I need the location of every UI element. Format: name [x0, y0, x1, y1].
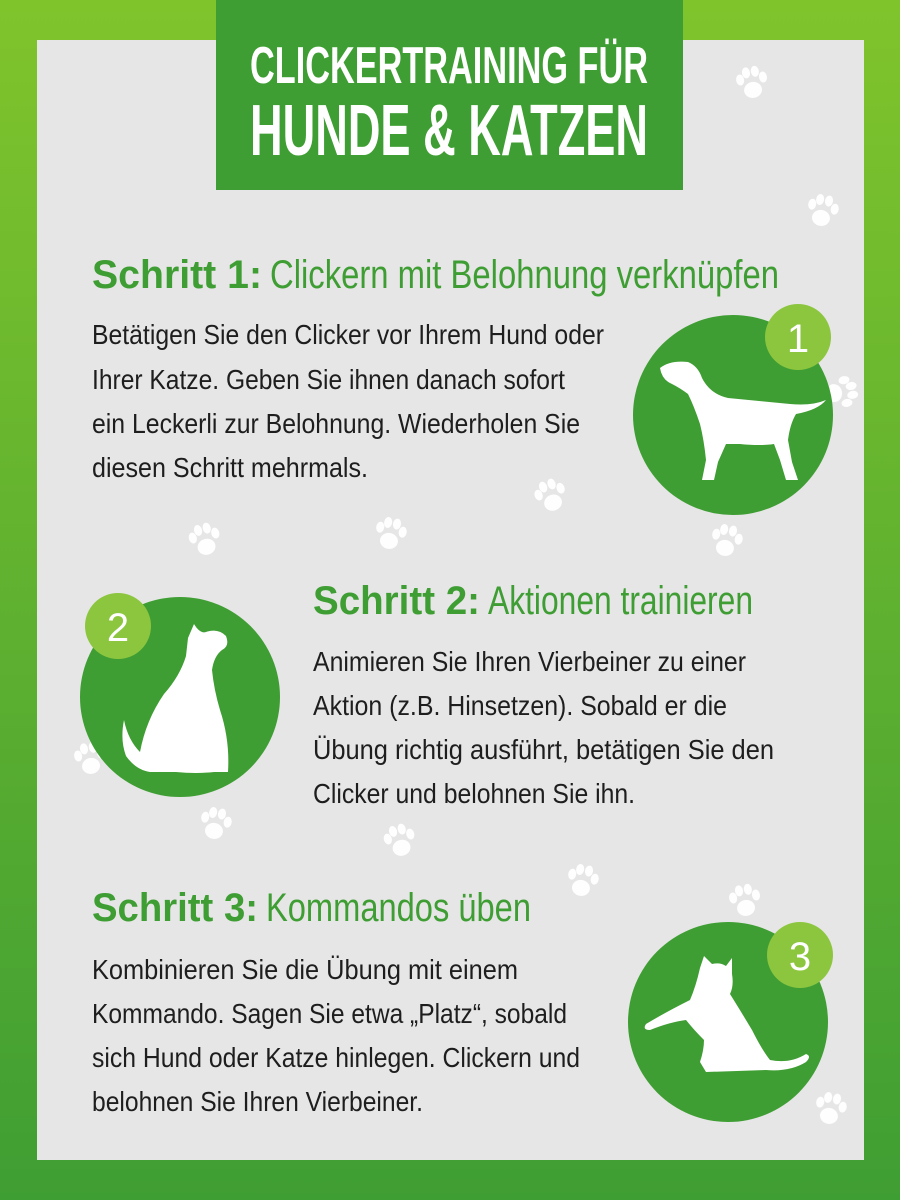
- text: step 3: Kombinieren Sie die Übung mit einem: [92, 954, 518, 985]
- text: step 2: Aktion (z.B. Hinsetzen). Sobald er die: [313, 690, 727, 721]
- heading: Schritt 2: Schritt 2:: [313, 579, 480, 623]
- badge 3: 3: [789, 935, 811, 979]
- badge 1: [765, 304, 831, 370]
- heading: Schritt 3: Schritt 3:: [92, 886, 258, 930]
- text: step 1: ein Leckerli zur Belohnung. Wiederholen Sie: [92, 408, 580, 439]
- heading: Schritt 2: [313, 579, 753, 623]
- icon: standing dog circle: [633, 304, 833, 515]
- heading: Schritt 1: Clickern mit Belohnung verknüpfen: [270, 253, 779, 297]
- text: step 2: Clicker und belohnen Sie ihn.: [313, 778, 635, 809]
- text: step 1: Betätigen Sie den Clicker vor Ihrem Hund oder: [92, 319, 604, 350]
- title: [216, 0, 683, 190]
- heading: Schritt 1: [92, 253, 779, 297]
- title: CLICKERTRAINING FÜR: [250, 37, 648, 95]
- icon: cat circle: [628, 922, 833, 1122]
- heading: Schritt 3: [92, 886, 531, 930]
- heading: Schritt 3: Kommandos üben: [266, 886, 531, 930]
- heading: Schritt 1: Schritt 1:: [92, 253, 262, 297]
- text: step 1: Ihrer Katze. Geben Sie ihnen danach sofort: [92, 364, 565, 395]
- icon: sitting dog circle: [80, 593, 280, 797]
- text: step 1: [92, 319, 604, 483]
- text: step 2: Animieren Sie Ihren Vierbeiner zu einer: [313, 646, 746, 677]
- text: step 3: sich Hund oder Katze hinlegen. Clickern und: [92, 1042, 580, 1073]
- badge 2: [85, 593, 151, 659]
- badge 1: 1: [787, 317, 809, 361]
- text: step 1: diesen Schritt mehrmals.: [92, 452, 368, 483]
- text: step 2: [313, 646, 774, 809]
- text: step 3: belohnen Sie Ihren Vierbeiner.: [92, 1086, 423, 1117]
- badge 3: [767, 922, 833, 988]
- text: step 3: [92, 954, 580, 1117]
- heading: Schritt 2: Aktionen trainieren: [488, 579, 753, 623]
- title: HUNDE & KATZEN: [250, 91, 648, 171]
- text: step 2: Übung richtig ausführt, betätigen Sie den: [313, 734, 774, 765]
- badge 2: 2: [107, 606, 129, 650]
- text: step 3: Kommando. Sagen Sie etwa „Platz“, sobald: [92, 998, 567, 1029]
- paw prints: [72, 64, 860, 1127]
